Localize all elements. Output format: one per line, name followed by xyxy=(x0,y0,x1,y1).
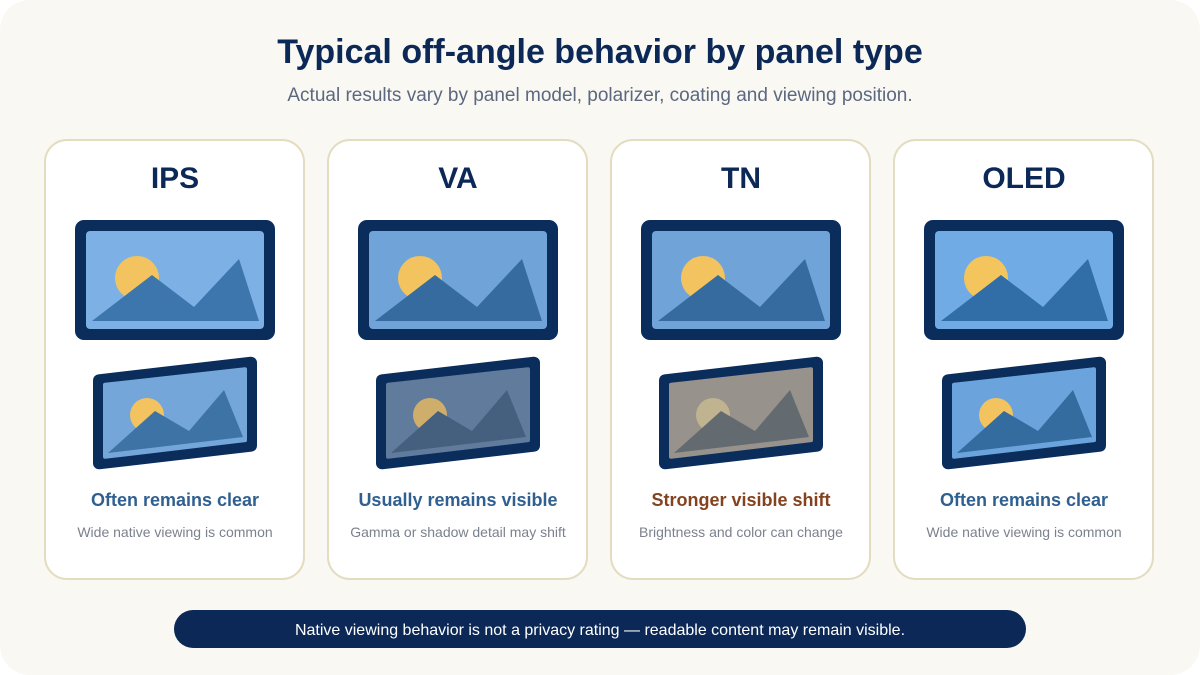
callout: Native viewing behavior is not a privacy rating — readable content may remain visible. xyxy=(295,622,905,639)
heading: OLED: OLED xyxy=(982,162,1066,195)
note: Wide native viewing is common xyxy=(77,524,273,540)
icon: front-view monitor xyxy=(924,220,1124,340)
verdict: Stronger visible shift xyxy=(651,490,831,510)
verdict: Often remains clear xyxy=(940,490,1108,510)
icon: off-angle monitor xyxy=(382,363,534,463)
panel: TN xyxy=(611,140,870,579)
heading: VA: VA xyxy=(438,162,478,195)
panel: VA xyxy=(328,140,587,579)
note: Brightness and color can change xyxy=(639,524,843,540)
heading: IPS: IPS xyxy=(151,162,199,195)
icon: front-view monitor xyxy=(75,220,275,340)
subtitle: Actual results vary by panel model, polarizer, coating and viewing position. xyxy=(287,85,913,106)
verdict: Usually remains visible xyxy=(358,490,558,510)
note: Gamma or shadow detail may shift xyxy=(350,524,566,540)
icon: off-angle monitor xyxy=(948,363,1100,463)
icon: off-angle monitor xyxy=(99,363,251,463)
heading: TN: TN xyxy=(721,162,761,195)
icon: front-view monitor xyxy=(641,220,841,340)
icon: off-angle monitor xyxy=(665,363,817,463)
callout xyxy=(174,610,1026,648)
note: Wide native viewing is common xyxy=(926,524,1122,540)
panel: IPS xyxy=(45,140,304,579)
icon: front-view monitor xyxy=(358,220,558,340)
title: Typical off-angle behavior by panel type xyxy=(277,33,923,71)
panel: OLED xyxy=(894,140,1153,579)
verdict: Often remains clear xyxy=(91,490,259,510)
